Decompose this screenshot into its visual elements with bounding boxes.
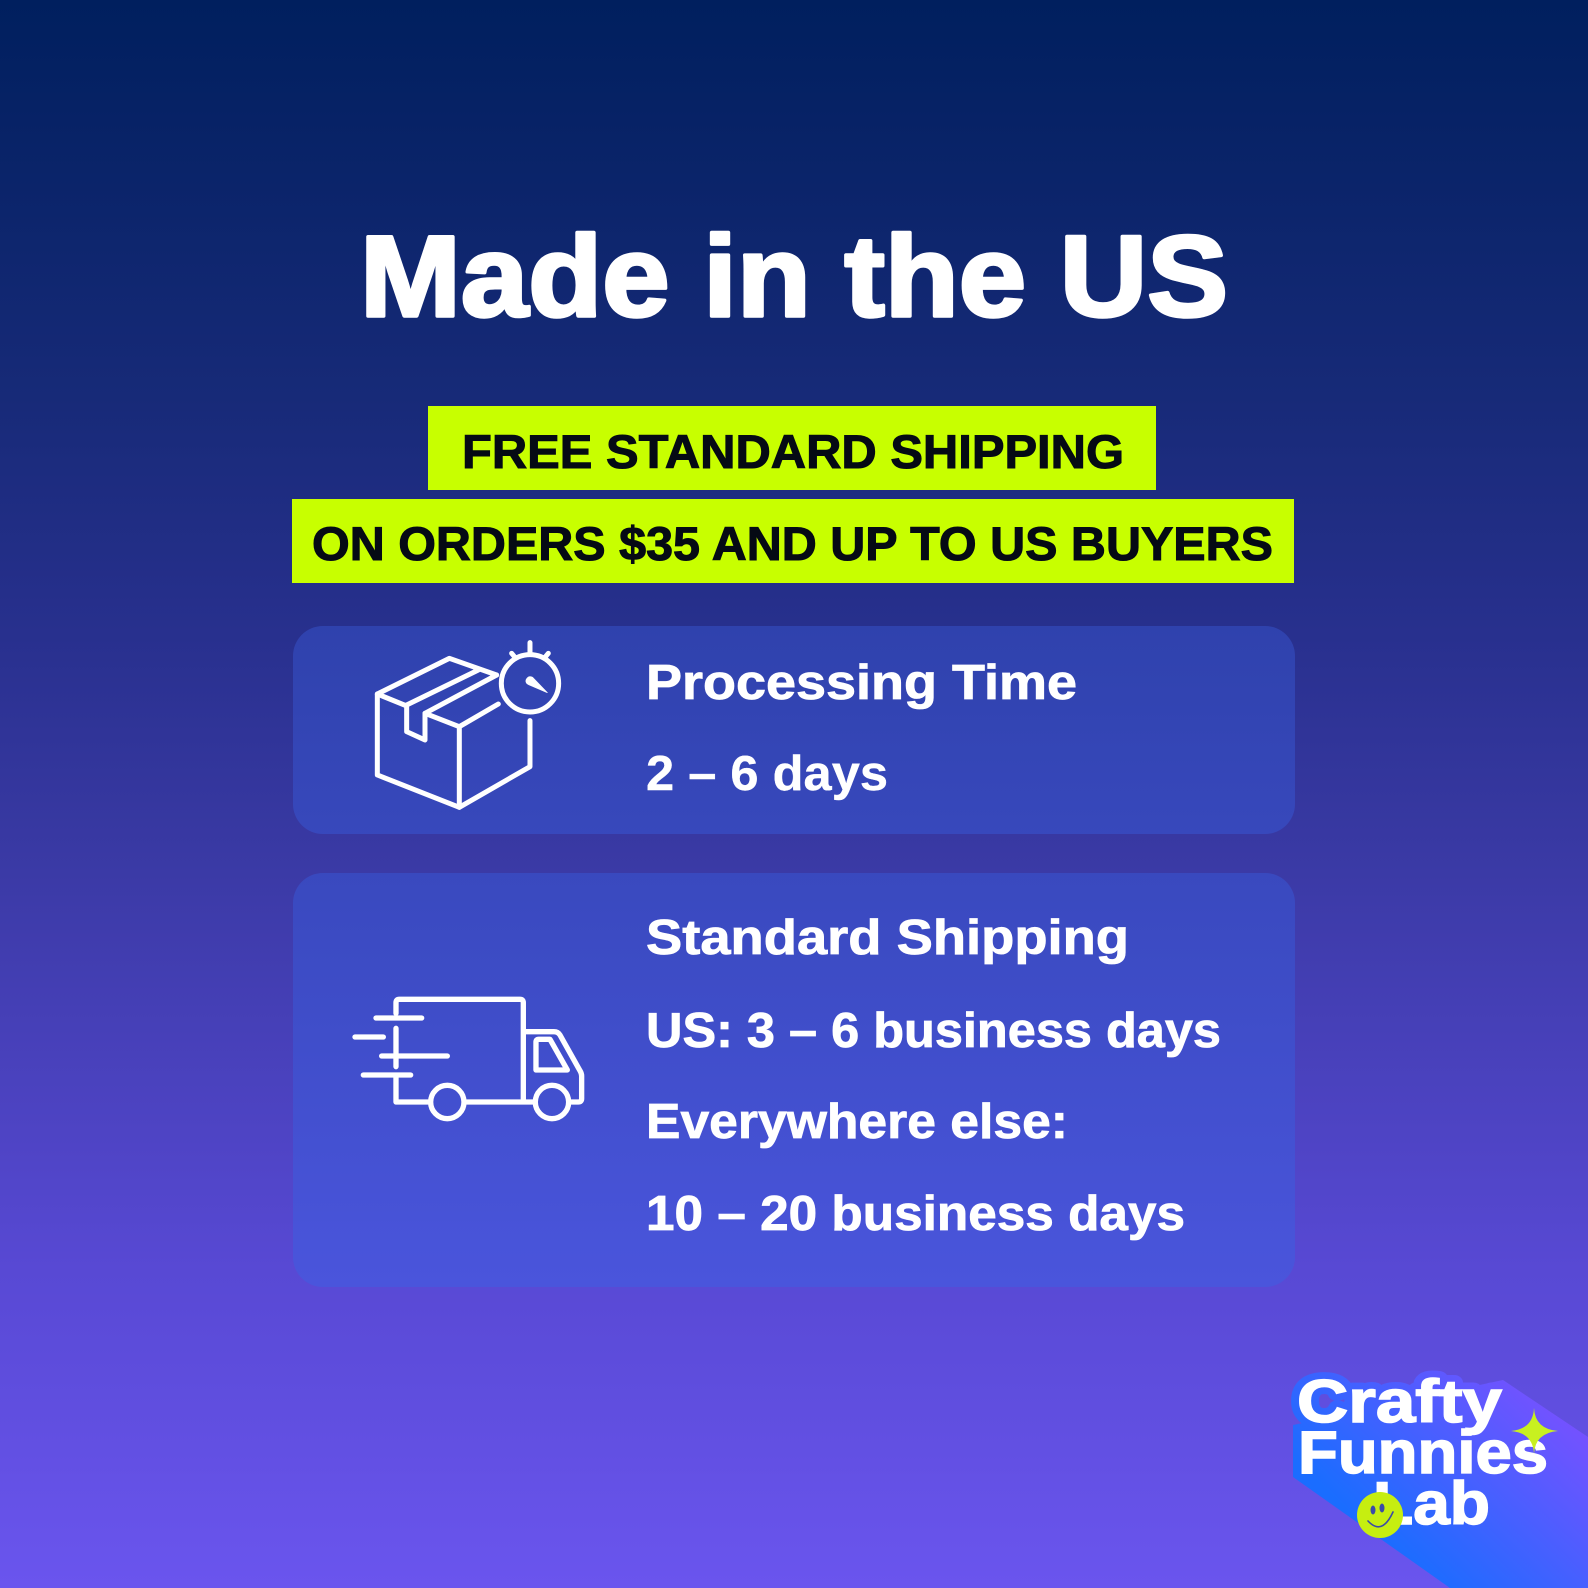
heading: standard shipping: Standard Shipping	[646, 911, 1129, 965]
text: US delivery: US: 3 – 6 business days	[646, 1004, 1221, 1058]
logo: Crafty Funnies Lab	[1293, 1368, 1588, 1588]
logo text halo	[1297, 1368, 1548, 1486]
icon: box with stopwatch	[377, 643, 559, 807]
logo text halo: Crafty	[1297, 1368, 1503, 1435]
banner: orders over $35: ON ORDERS $35 AND UP TO US BUYERS	[312, 517, 1273, 570]
banner: free standard shipping	[428, 406, 1156, 490]
logo text halo: Funnies	[1298, 1419, 1548, 1486]
logo wordmark: Funnies	[1298, 1419, 1548, 1486]
banner: free standard shipping: FREE STANDARD SHIPPING	[462, 425, 1124, 478]
banner: orders over $35	[292, 499, 1294, 583]
logo wordmark: Lab	[1373, 1470, 1490, 1537]
icon: sparkle	[1511, 1408, 1558, 1454]
icon: smiley	[1357, 1492, 1403, 1538]
title: Made in the US	[360, 213, 1228, 341]
text: processing days: 2 – 6 days	[646, 747, 888, 801]
panel: standard shipping	[293, 873, 1295, 1287]
text: everywhere else: Everywhere else:	[646, 1095, 1068, 1149]
logo wordmark: Crafty	[1297, 1368, 1503, 1435]
panel: processing time	[293, 626, 1295, 834]
icon: delivery truck	[355, 999, 582, 1119]
logo long shadow	[1293, 1380, 1588, 1588]
heading: processing time: Processing Time	[646, 656, 1077, 710]
text: international delivery: 10 – 20 business days	[646, 1187, 1185, 1241]
logo wordmark	[1297, 1368, 1548, 1537]
